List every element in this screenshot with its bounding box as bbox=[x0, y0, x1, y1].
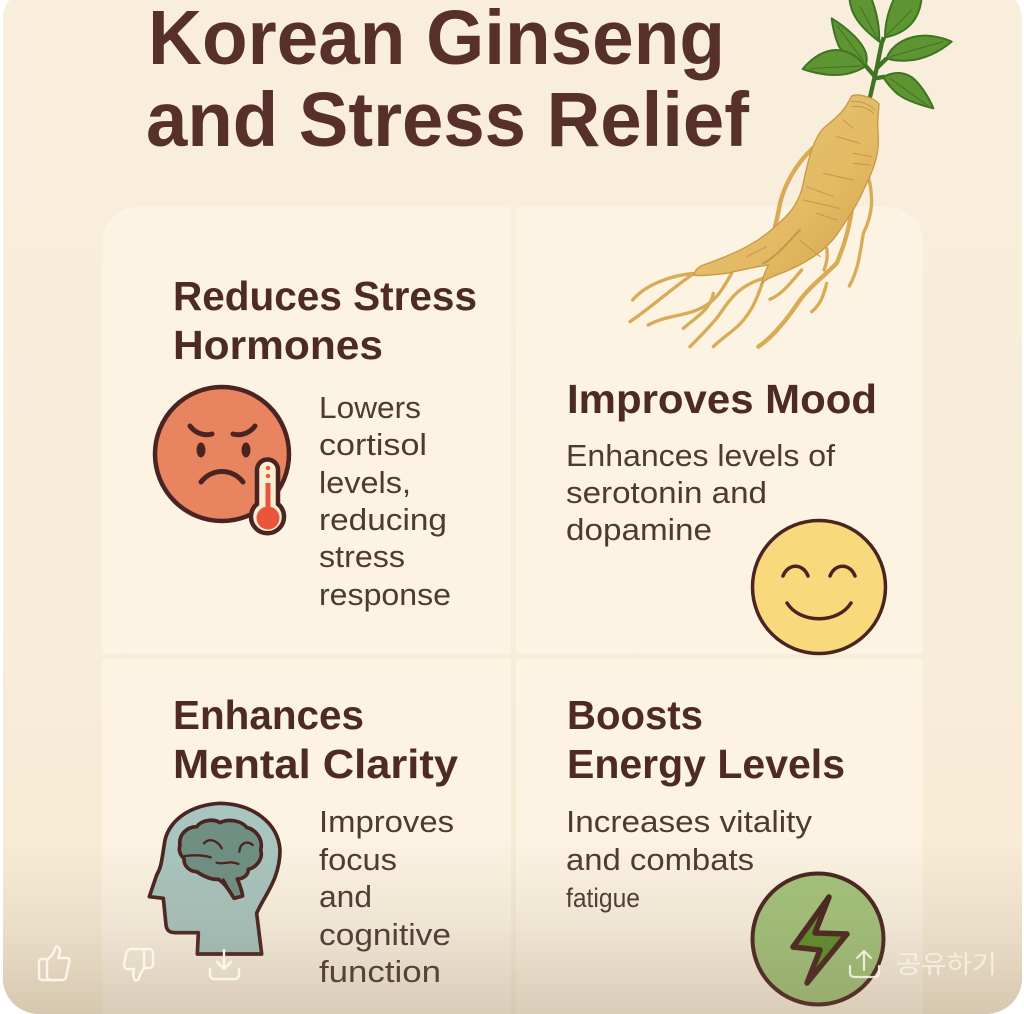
panel: reduces stress hormones bbox=[102, 330, 511, 654]
heading bbox=[173, 692, 458, 787]
body text: levels, bbox=[319, 465, 411, 500]
body text bbox=[319, 390, 451, 612]
panel: enhances mental clarity bbox=[102, 659, 511, 1014]
heading bbox=[176, 280, 476, 360]
section: improves mood text bbox=[566, 376, 877, 547]
body text: Enhances levels of bbox=[566, 438, 835, 473]
heading: Enhances bbox=[173, 692, 364, 738]
panel grid bbox=[102, 330, 923, 1014]
title bbox=[148, 8, 750, 147]
title: and Stress Relief bbox=[146, 77, 749, 163]
body text: function bbox=[319, 954, 441, 989]
root tendrils bbox=[630, 148, 872, 347]
action bar bbox=[39, 947, 997, 980]
ginseng illustration bbox=[630, 0, 952, 347]
icon: head with brain bbox=[149, 803, 280, 954]
heading: Hormones bbox=[173, 322, 383, 368]
icon: thumbs up bbox=[39, 947, 70, 980]
body text: reducing bbox=[319, 502, 447, 537]
icon: thumbs down bbox=[124, 949, 153, 980]
body text: cognitive bbox=[319, 917, 451, 952]
heading: Mental Clarity bbox=[173, 741, 458, 787]
heading bbox=[570, 701, 844, 786]
body text: fatigue bbox=[566, 883, 640, 913]
body text: stress bbox=[319, 539, 405, 574]
heading: Energy Levels bbox=[567, 741, 845, 787]
icon: angry face with thermometer bbox=[155, 387, 289, 533]
body text: dopamine bbox=[566, 512, 712, 547]
icon: download bbox=[210, 950, 239, 979]
heading: Boosts bbox=[567, 692, 703, 738]
body text: and combats bbox=[566, 842, 754, 877]
leaves and stem bbox=[803, 0, 952, 108]
body text: response bbox=[319, 577, 451, 612]
heading: Reduces Stress bbox=[173, 273, 477, 319]
body text: Increases vitality bbox=[566, 804, 813, 839]
section: stress hormones text bbox=[173, 273, 477, 612]
section: energy levels text bbox=[566, 692, 845, 913]
body text: and bbox=[319, 879, 372, 914]
panel: improves mood bbox=[516, 330, 923, 654]
panel: boosts energy levels bbox=[516, 659, 923, 1014]
root wrinkles bbox=[747, 101, 875, 263]
body text bbox=[566, 804, 813, 913]
body text: cortisol bbox=[319, 427, 427, 462]
section: mental clarity text bbox=[173, 692, 458, 989]
heading: Improves Mood bbox=[567, 376, 877, 422]
share label: 공유하기 bbox=[896, 951, 997, 979]
body text bbox=[319, 804, 454, 989]
bottom shade overlay bbox=[2, 882, 1022, 1014]
body text: Lowers bbox=[319, 390, 421, 425]
body text bbox=[566, 438, 835, 547]
body text: focus bbox=[319, 842, 397, 877]
icon: lightning bolt bbox=[752, 874, 884, 1004]
icon: smiling face bbox=[752, 520, 886, 654]
root body bbox=[694, 95, 879, 283]
body text: Improves bbox=[319, 804, 454, 839]
icon: share bbox=[850, 951, 879, 977]
body text: serotonin and bbox=[566, 475, 767, 510]
